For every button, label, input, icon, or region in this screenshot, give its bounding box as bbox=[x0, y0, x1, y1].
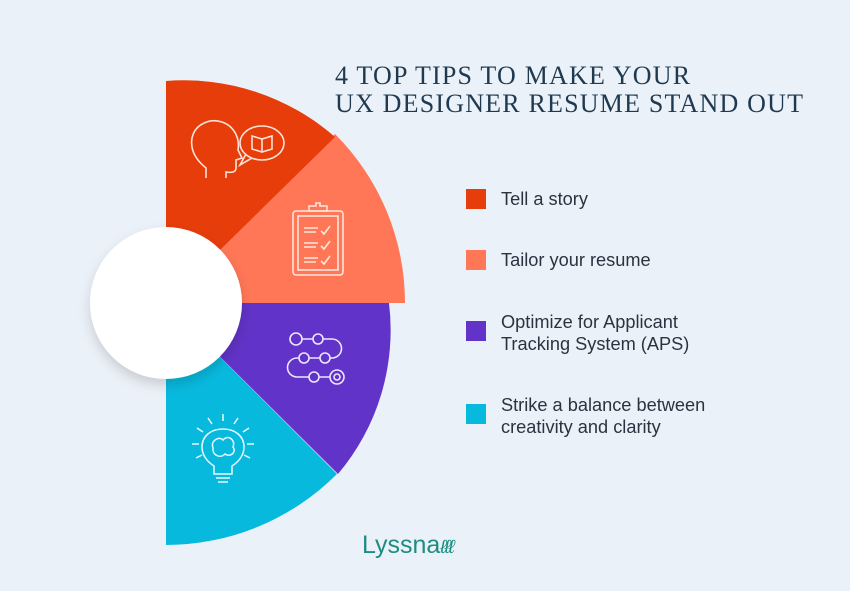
title: 4 TOP TIPS TO MAKE YOUR bbox=[335, 61, 691, 90]
icon: path journey bbox=[288, 333, 344, 384]
icon: head with speech bubble bbox=[192, 121, 284, 178]
legend item: tell a story: Tell a story bbox=[501, 189, 588, 209]
segment: teal bbox=[166, 303, 337, 545]
legend item: balance bbox=[466, 395, 705, 437]
legend item: balance: Strike a balance between bbox=[501, 395, 705, 415]
icon: clipboard bbox=[293, 203, 343, 275]
center circle bbox=[90, 227, 242, 379]
segment: red bbox=[166, 80, 335, 303]
legend item: balance: creativity and clarity bbox=[501, 417, 661, 437]
title bbox=[335, 61, 804, 118]
icon: lightbulb with brain bbox=[192, 414, 254, 482]
logo: Lyssnaℓℓℓ bbox=[362, 531, 453, 559]
segment: salmon bbox=[166, 134, 405, 303]
legend item: optimize bbox=[466, 312, 689, 354]
legend item: optimize: Optimize for Applicant bbox=[501, 312, 678, 332]
title: UX DESIGNER RESUME STAND OUT bbox=[335, 89, 804, 118]
legend item: optimize: Tracking System (APS) bbox=[501, 334, 689, 354]
segment: purple bbox=[166, 303, 391, 474]
legend item: tailor: Tailor your resume bbox=[501, 250, 651, 270]
